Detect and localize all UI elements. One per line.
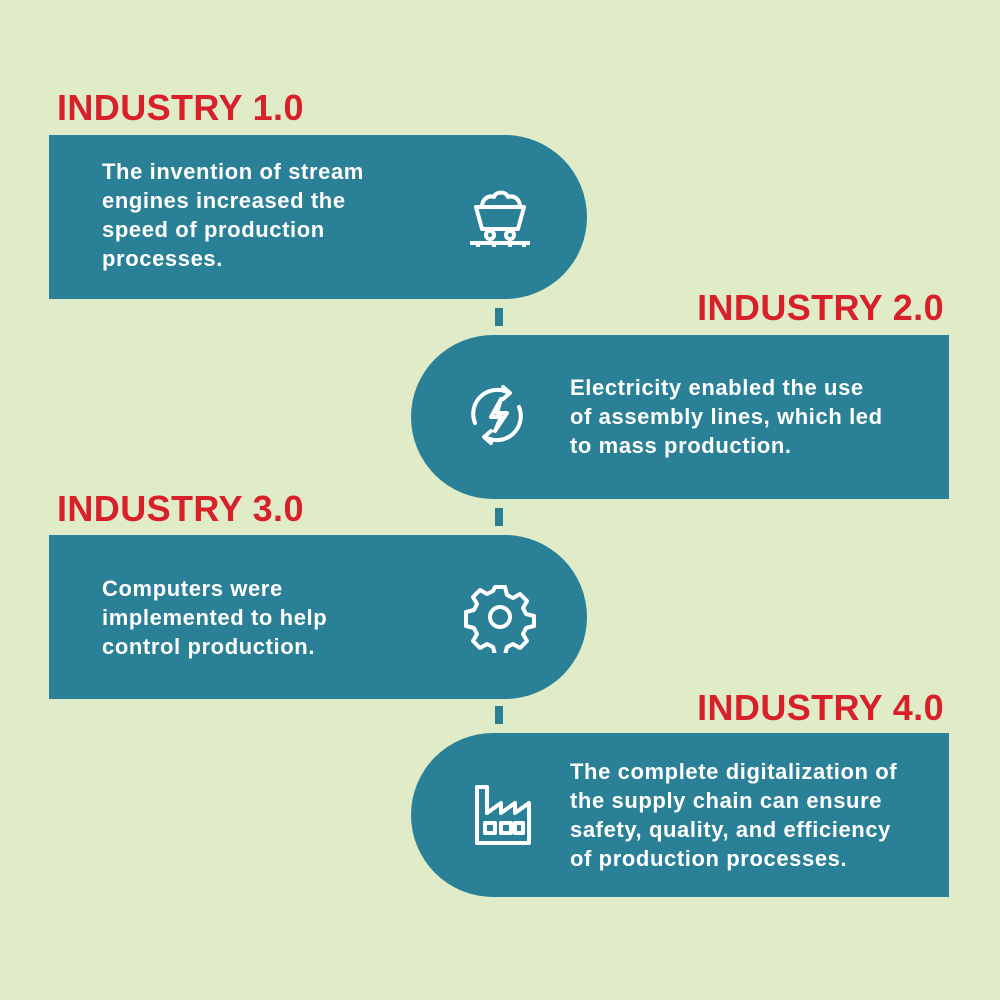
text: industry 4.0	[570, 759, 897, 871]
text: industry 3.0: Computers were	[102, 576, 283, 601]
connector	[495, 308, 503, 326]
panel: industry 4.0	[411, 733, 949, 897]
heading: industry 3.0: INDUSTRY 3.0	[57, 488, 304, 529]
text: industry 1.0: speed of production	[102, 217, 325, 242]
text: industry 2.0	[570, 375, 883, 458]
text: industry 4.0: the supply chain can ensure	[570, 788, 882, 813]
text: industry 1.0: processes.	[102, 246, 223, 271]
text: industry 2.0: Electricity enabled the use	[570, 375, 864, 400]
panel: industry 2.0	[411, 335, 949, 499]
text: industry 1.0: The invention of stream	[102, 159, 364, 184]
icon: energy cycle	[471, 384, 523, 446]
connector	[495, 706, 503, 724]
panel: industry 1.0	[49, 135, 587, 299]
heading: industry 1.0: INDUSTRY 1.0	[57, 87, 304, 128]
icon: gear	[464, 585, 536, 653]
text: industry 1.0: engines increased the	[102, 188, 346, 213]
text: industry 3.0: control production.	[102, 634, 315, 659]
connector	[495, 508, 503, 526]
panel: industry 3.0	[49, 535, 587, 699]
text: industry 1.0	[102, 159, 364, 271]
icon: mine cart	[470, 190, 530, 247]
icon: factory	[475, 785, 531, 845]
text: industry 4.0: of production processes.	[570, 846, 847, 871]
text: industry 3.0	[102, 576, 327, 659]
text: industry 2.0: of assembly lines, which led	[570, 404, 883, 429]
text: industry 4.0: safety, quality, and efficiency	[570, 817, 891, 842]
text: industry 3.0: implemented to help	[102, 605, 327, 630]
heading: industry 4.0: INDUSTRY 4.0	[697, 687, 944, 728]
text: industry 4.0: The complete digitalization of	[570, 759, 897, 784]
heading: industry 2.0: INDUSTRY 2.0	[697, 287, 944, 328]
text: industry 2.0: to mass production.	[570, 433, 792, 458]
